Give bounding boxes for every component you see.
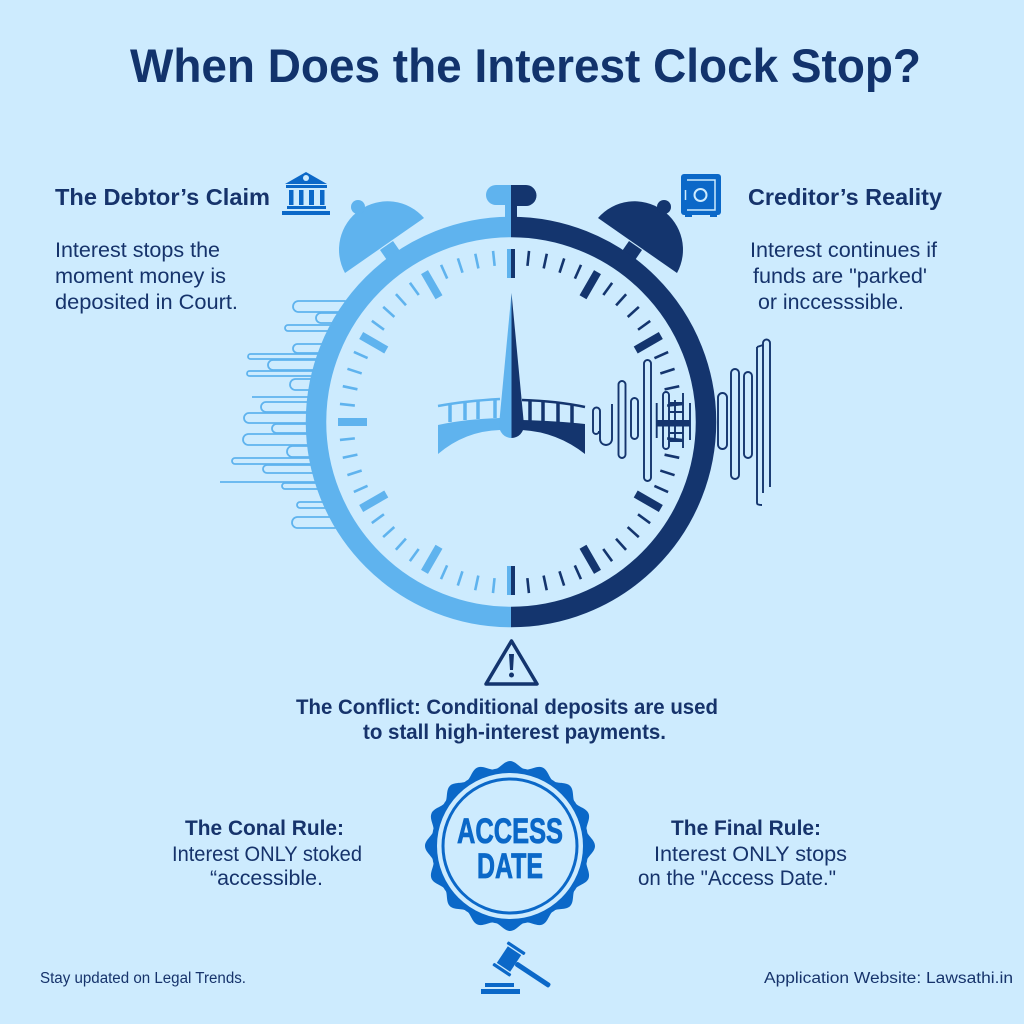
- text: the final rule: Interest ONLY stops: [654, 843, 847, 866]
- heading: creditor: Creditor’s Reality: [748, 184, 942, 210]
- text: the conflict: [296, 695, 718, 744]
- footer right: Application Website: Lawsathi.in: [764, 970, 1013, 987]
- text: the conal rule: Interest ONLY stoked: [172, 843, 362, 866]
- text: the conal rule: [172, 817, 362, 890]
- text: debtor body: moment money is: [55, 264, 226, 288]
- text: creditor body: [750, 238, 937, 314]
- ticks right: [511, 249, 682, 595]
- text: the final rule: The Final Rule:: [671, 817, 821, 840]
- badge: access date: DATE: [477, 847, 543, 886]
- text: the conal rule: The Conal Rule:: [185, 817, 344, 840]
- text: debtor body: Interest stops the: [55, 238, 220, 262]
- icon: warning: [486, 641, 537, 684]
- text: the final rule: [638, 817, 847, 890]
- bridge right: [522, 400, 585, 454]
- footer left: Stay updated on Legal Trends.: [40, 970, 246, 987]
- crown left: [486, 185, 511, 222]
- right bell: [598, 200, 683, 273]
- hand left half: [499, 293, 512, 438]
- chart: right sound waves: [593, 340, 770, 505]
- badge: access date: [425, 761, 595, 931]
- text: debtor body: [55, 238, 238, 314]
- chart: left flowing lines: [220, 301, 350, 528]
- icon: gavel: [481, 941, 558, 998]
- ticks left: [338, 249, 511, 595]
- ring right half: [511, 227, 706, 617]
- title: When Does the Interest Clock Stop?: [130, 39, 921, 92]
- text: debtor body: deposited in Court.: [55, 290, 238, 314]
- text: creditor body: or inccesssible.: [758, 290, 904, 314]
- bridge left: [438, 399, 500, 454]
- panel: debtor's claim: [55, 172, 330, 314]
- badge: access date: ACCESS: [457, 812, 563, 851]
- text: the conflict: to stall high-interest payments.: [363, 720, 666, 744]
- text: the conal rule: “accessible.: [210, 867, 323, 890]
- text: the final rule: on the "Access Date.": [638, 867, 836, 890]
- text: creditor body: Interest continues if: [750, 238, 937, 262]
- clock: [316, 185, 706, 617]
- icon: bank: [282, 172, 330, 215]
- panel: creditor's reality: [681, 174, 942, 314]
- icon: safe: [681, 174, 721, 217]
- text: the conflict: The Conflict: Conditional deposits are used: [296, 695, 718, 719]
- hand right half: [512, 293, 524, 438]
- ring left half: [316, 227, 511, 617]
- heading: debtor: The Debtor’s Claim: [55, 184, 270, 210]
- text: creditor body: funds are "parked': [753, 264, 927, 288]
- crown right: [511, 185, 536, 222]
- left bell: [339, 200, 424, 273]
